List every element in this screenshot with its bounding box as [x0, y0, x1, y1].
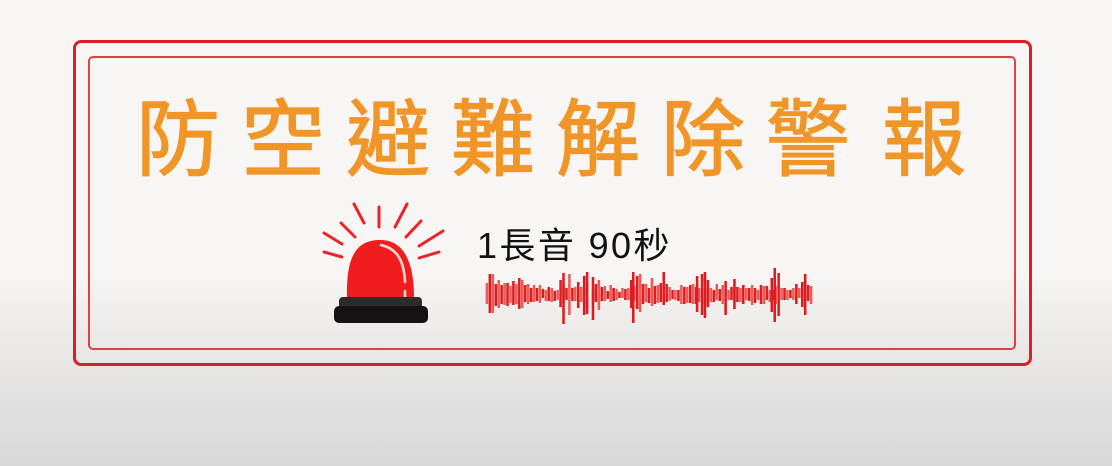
title: 空: [241, 73, 325, 194]
audio waveform: [486, 268, 812, 324]
outer red frame: [73, 40, 1032, 366]
duration label: 1長音 90秒: [477, 225, 672, 266]
siren base: [334, 297, 428, 323]
siren light rays: [324, 204, 443, 258]
dome highlight: [381, 245, 405, 298]
title: [136, 73, 966, 194]
title: 報: [882, 73, 966, 194]
icon: red siren: [322, 202, 445, 323]
siren dome: [347, 240, 414, 298]
title: 難: [451, 73, 535, 194]
title: 避: [346, 73, 430, 194]
title: 防: [136, 73, 220, 194]
inner red frame: [88, 56, 1016, 350]
title: 除: [661, 73, 745, 194]
title: 解: [556, 73, 640, 194]
title: 警: [766, 73, 850, 194]
